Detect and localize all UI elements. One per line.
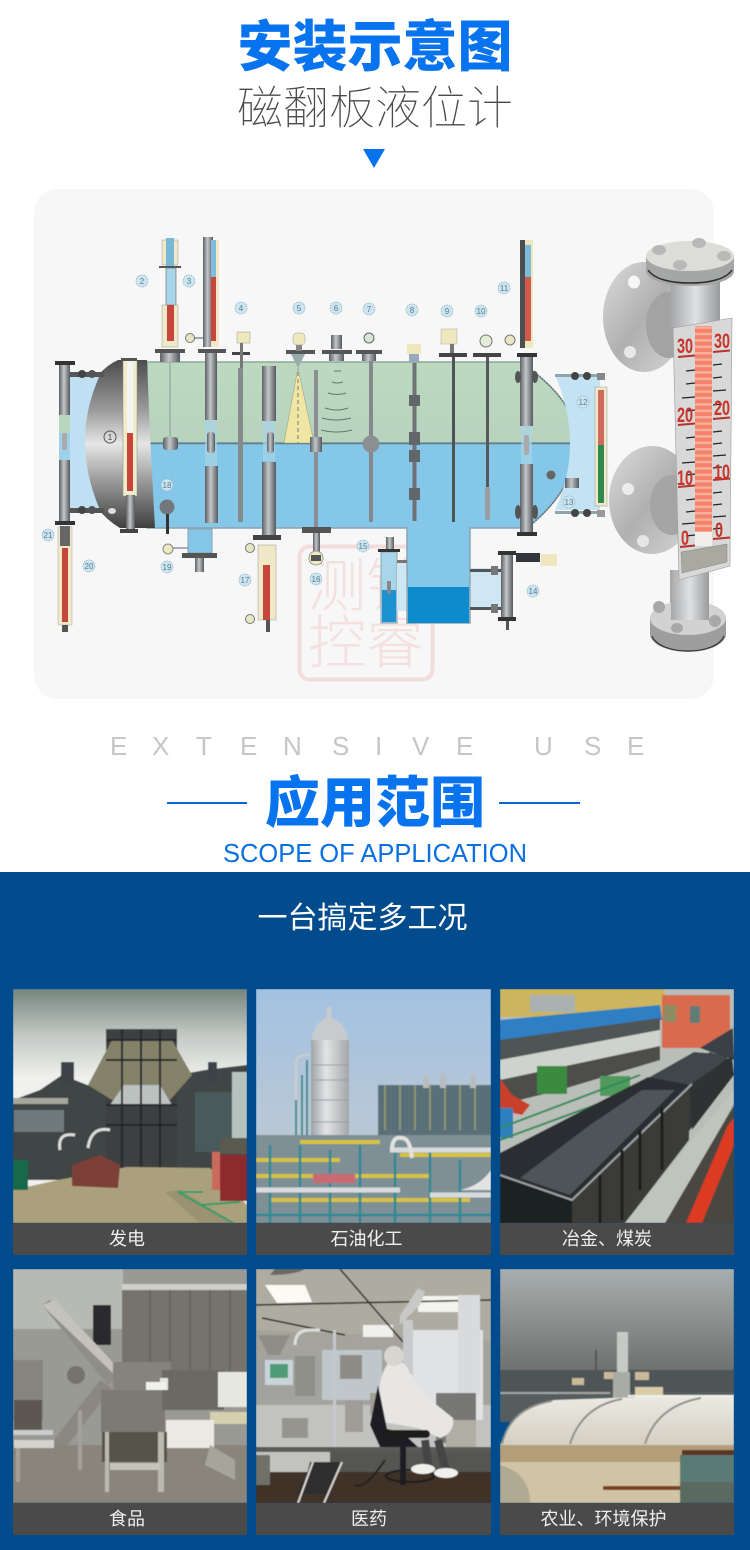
instrument 11: right gauge tube	[505, 240, 538, 536]
magnetic flap level gauge photo: 10	[714, 461, 730, 484]
callout numbers: 17	[241, 576, 250, 585]
caption	[500, 1223, 734, 1255]
instrument 17: through-tank tube and lower gauge	[246, 366, 281, 632]
instrument 18: float switch	[160, 500, 174, 534]
callout numbers: 5	[297, 304, 302, 313]
english heading: extensive use: EXTENSIVE USE	[110, 731, 644, 761]
instrument 5: radar with cone	[284, 333, 315, 443]
panel: applications	[0, 872, 750, 1550]
callout numbers: 9	[445, 307, 450, 316]
callout numbers: 19	[163, 563, 172, 572]
instrument 15: external chamber	[378, 537, 407, 623]
magnetic flap level gauge photo: 0	[715, 519, 723, 542]
instrument 12: right side gauge	[546, 372, 607, 517]
watermark stamp: 测铂	[308, 539, 424, 623]
callout numbers: 1	[108, 433, 113, 442]
nameplate	[681, 544, 727, 573]
card: agriculture and environment	[500, 1269, 734, 1535]
callout numbers: 15	[359, 542, 368, 551]
card: medicine	[256, 1269, 491, 1535]
card: metallurgy and coal: 冶金、煤炭	[562, 1225, 652, 1251]
tank: liquid vessel	[147, 362, 577, 623]
caption	[13, 1503, 247, 1535]
callout numbers: 4	[239, 304, 244, 313]
panel: installation diagram	[34, 189, 734, 699]
instrument 16: float rod	[302, 370, 331, 565]
instrument 6: ultrasonic with wave arcs	[321, 335, 352, 432]
card: petrochemical: 石油化工	[330, 1225, 402, 1251]
lower side flange	[609, 446, 695, 554]
caption	[500, 1503, 734, 1535]
callout numbers: 7	[367, 305, 372, 314]
tank head (steel dome)	[76, 360, 155, 528]
card: food: 食品	[109, 1505, 145, 1531]
card: power generation	[13, 989, 247, 1255]
instrument 3: long gauge	[186, 237, 226, 523]
top flange cap	[646, 238, 734, 286]
icon: down triangle	[363, 149, 385, 168]
instrument 10: rod with probe	[473, 335, 501, 520]
instrument 4: capacitive rod	[232, 332, 250, 522]
trackside	[625, 1090, 734, 1223]
scale ticks	[678, 350, 730, 547]
caption	[256, 1503, 491, 1535]
title: 安装示意图	[237, 2, 513, 82]
subtitle: 磁翻板液位计	[237, 72, 513, 138]
card: power generation: 发电	[109, 1225, 145, 1251]
card: agriculture and environment: 农业、环境保护	[540, 1505, 666, 1531]
magnetic flap level gauge photo: 20	[714, 397, 730, 420]
instrument 8: multi-float rod	[407, 344, 421, 521]
callout numbers: 16	[312, 575, 321, 584]
instrument 14: side chamber with actuator	[470, 551, 557, 630]
caption	[13, 1223, 247, 1255]
instrument 7: ball float	[356, 333, 382, 522]
card: medicine: 医药	[351, 1505, 387, 1531]
left bypass gauge	[55, 361, 104, 632]
main tube	[671, 272, 720, 332]
callout numbers: 10	[477, 307, 486, 316]
card: petrochemical	[256, 989, 491, 1255]
scale plate	[673, 318, 732, 580]
callout numbers: 13	[565, 498, 574, 507]
callout numbers: 21	[44, 531, 53, 540]
far wagons	[660, 1052, 732, 1140]
watermark stamp	[300, 539, 432, 680]
callout numbers: 11	[500, 284, 509, 293]
instrument 19: bottom nozzle	[163, 529, 217, 572]
bottom flange	[650, 600, 726, 652]
magnetic flap level gauge photo: 10	[677, 467, 693, 490]
magnetic flap level gauge photo: 30	[714, 330, 730, 353]
section title: 一台搞定多工况	[258, 893, 468, 937]
card: metallurgy and coal	[500, 989, 734, 1255]
head gauge	[108, 358, 138, 533]
instrument 2: top gauge with float	[155, 238, 185, 450]
main wagon	[500, 1077, 690, 1200]
callout numbers: 3	[187, 277, 192, 286]
callout numbers: 6	[334, 304, 339, 313]
operator	[378, 1360, 453, 1438]
callout numbers: 2	[140, 277, 145, 286]
magnetic flap level gauge photo: 20	[677, 404, 693, 427]
scale numbers: 30	[677, 335, 693, 358]
callout numbers: 18	[163, 481, 172, 490]
callout numbers: 20	[85, 562, 94, 571]
magnetic flap level gauge photo	[603, 238, 734, 652]
caption	[256, 1223, 491, 1255]
card: food	[13, 1269, 247, 1535]
upper side flange	[603, 262, 692, 372]
english subheading: SCOPE OF APPLICATION	[223, 838, 527, 868]
flap column	[695, 326, 712, 532]
instrument 9: solid rod	[439, 329, 467, 522]
callout numbers: 8	[410, 306, 415, 315]
callout numbers: 12	[579, 398, 588, 407]
callout numbers	[42, 275, 589, 597]
heading: scope of application: 应用范围	[265, 758, 485, 838]
callout numbers: 14	[529, 587, 538, 596]
magnetic flap level gauge photo: 0	[681, 527, 689, 550]
watermark stamp: 控睿	[308, 596, 424, 680]
